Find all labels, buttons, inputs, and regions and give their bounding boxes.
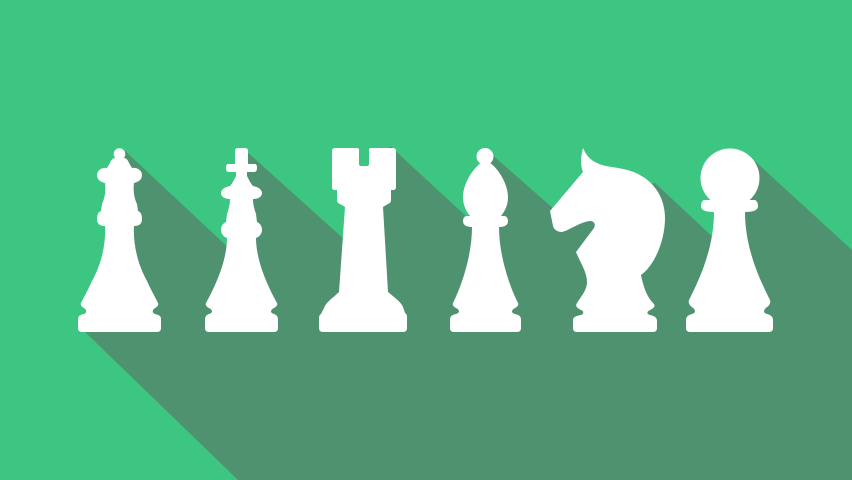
knight [550, 148, 665, 332]
pawn [686, 148, 773, 332]
queen [78, 148, 161, 332]
rook [319, 148, 407, 332]
king [205, 148, 278, 332]
long shadow of the pieces [84, 146, 852, 480]
bishop [450, 148, 521, 332]
